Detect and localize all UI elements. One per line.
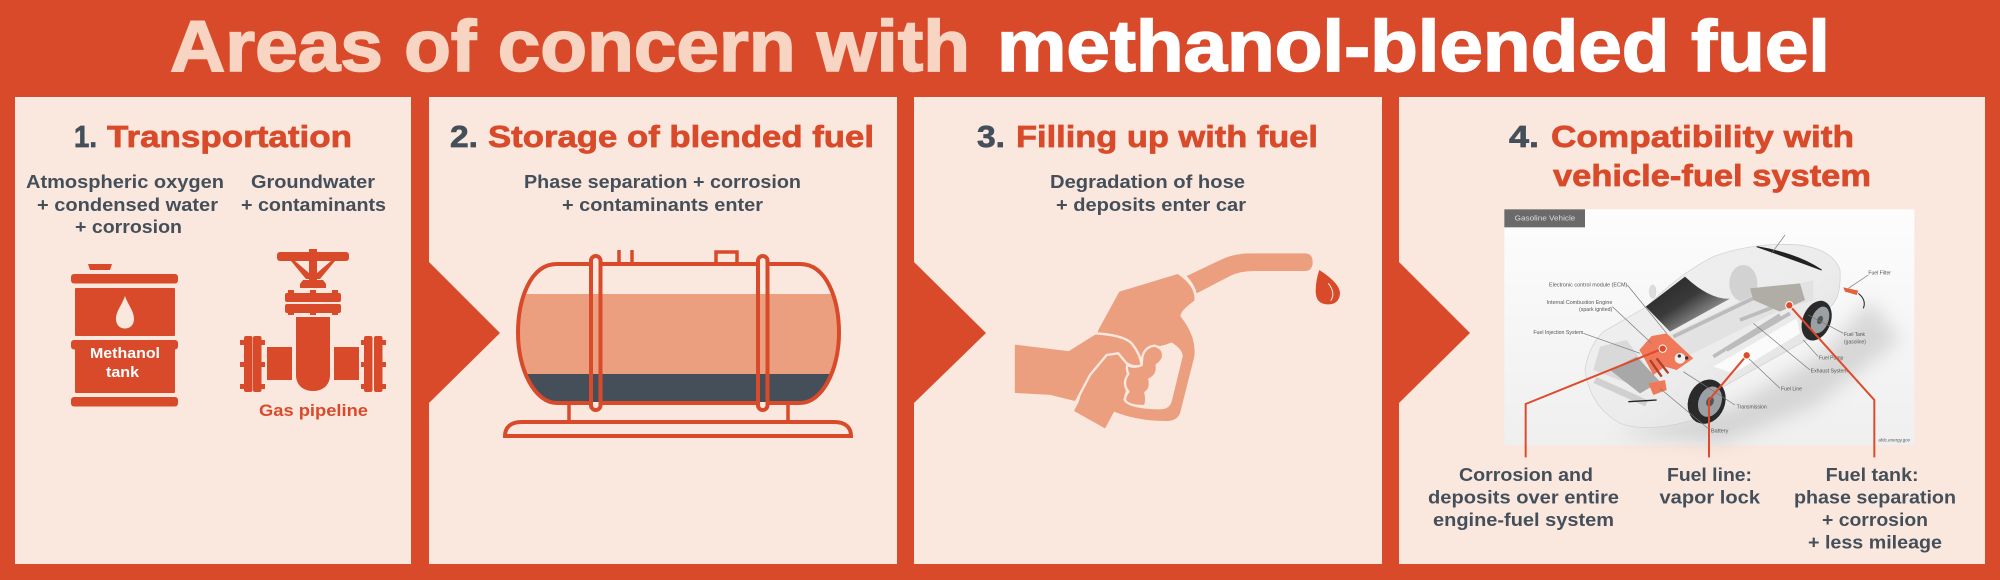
text: engine-fuel system: engine-fuel system: [1433, 510, 1614, 530]
text: pipeline risks: + contaminants: [241, 195, 386, 215]
part labels: Battery: [1711, 429, 1728, 435]
engine highlight: [1639, 333, 1693, 395]
text: storage risks: Phase separation + corrosion: [524, 172, 801, 192]
part labels: Exhaust System: [1811, 369, 1848, 375]
icon: storage tank: [505, 250, 851, 436]
text: pipeline risks: Groundwater: [251, 172, 375, 192]
badge: gasoline vehicle: [1504, 209, 1585, 227]
text: fuel line: Fuel line:: [1667, 465, 1752, 485]
icon: methanol tank: tank: [106, 364, 140, 381]
title: Areas of concern with: [170, 7, 970, 87]
heading: 4. Compatibility with vehicle-fuel system: [1509, 119, 1871, 193]
part labels: (spark ignited): [1579, 307, 1612, 313]
car shadow: [1613, 300, 1900, 443]
text: fuel tank: phase separation: [1794, 488, 1956, 508]
panel: transportation: [15, 97, 411, 564]
text: fuel line: [1660, 465, 1761, 508]
title: [170, 7, 1830, 87]
text: fuel tank: + corrosion: [1822, 510, 1928, 530]
part labels: Fuel Line: [1781, 387, 1802, 393]
text: fuel line: vapor lock: [1660, 488, 1761, 508]
text: tank risks: [26, 172, 224, 237]
title: methanol-blended fuel: [997, 7, 1830, 87]
part labels: afdc.energy.gov: [1878, 437, 1911, 442]
heading: 3. Filling up with fuel: 3.: [977, 119, 1005, 154]
leader lines: [1583, 235, 1868, 430]
panel: compatibility with vehicle-fuel system: [1399, 97, 1985, 564]
icon: fuel nozzle and hand: [1009, 253, 1340, 428]
diagram: gasoline vehicle: [1504, 209, 1914, 457]
text: fuel tank: + less mileage: [1808, 532, 1942, 552]
text: tank risks: + corrosion: [75, 217, 182, 237]
text: engine-fuel system: deposits over entire: [1428, 488, 1619, 508]
car body: [1585, 244, 1864, 430]
arrow: step 2 to 3: [910, 258, 986, 407]
part labels: [1533, 270, 1911, 442]
callout lines: [1526, 305, 1874, 457]
text: fuel tank: [1794, 465, 1956, 552]
icon: methanol tank: Methanol: [90, 345, 160, 362]
text: fuel tank: Fuel tank:: [1826, 465, 1919, 485]
heading: 4. Compatibility with vehicle-fuel system: Compatibility with: [1551, 119, 1854, 154]
part labels: Fuel Pump: [1819, 355, 1843, 361]
text: pipeline risks: [241, 172, 386, 215]
part labels: Fuel Tank: [1844, 332, 1865, 338]
heading: 4. Compatibility with vehicle-fuel system: vehicle-fuel system: [1553, 158, 1871, 193]
part labels: Internal Combustion Engine: [1547, 300, 1612, 306]
panel: filling up with fuel: [914, 97, 1382, 564]
text: tank risks: + condensed water: [37, 195, 218, 215]
badge: gasoline vehicle: Gasoline Vehicle: [1515, 214, 1575, 223]
text: storage risks: + contaminants enter: [562, 195, 763, 215]
part labels: Fuel Filter: [1868, 270, 1891, 276]
text: tank risks: Atmospheric oxygen: [26, 172, 224, 192]
text: engine-fuel system: [1428, 465, 1619, 530]
part labels: Electronic control module (ECM): [1549, 283, 1627, 289]
icon: gas pipeline valve: [240, 249, 386, 420]
panel: storage of blended fuel: [429, 97, 897, 564]
callout dots: [1659, 302, 1793, 359]
part labels: Transmission: [1737, 405, 1767, 411]
heading: 1. Transportation: 1.: [74, 119, 97, 154]
heading: 2. Storage of blended fuel: 2.: [450, 119, 478, 154]
text: storage risks: [524, 172, 801, 215]
text: filling risks: + deposits enter car: [1056, 195, 1246, 215]
heading: 2. Storage of blended fuel: Storage of blended fuel: [488, 119, 874, 154]
heading: 3. Filling up with fuel: Filling up with fuel: [1016, 119, 1318, 154]
text: filling risks: [1050, 172, 1246, 215]
icon: gas pipeline valve: Gas pipeline: [259, 401, 368, 420]
part labels: (gasoline): [1844, 339, 1866, 345]
arrow: step 1 to 2: [425, 258, 500, 407]
heading: 1. Transportation: Transportation: [107, 119, 352, 154]
arrow: step 3 to 4: [1395, 258, 1470, 407]
text: engine-fuel system: Corrosion and: [1459, 465, 1593, 485]
part labels: Fuel Injection System: [1533, 330, 1584, 336]
text: filling risks: Degradation of hose: [1050, 172, 1245, 192]
heading: 4. Compatibility with vehicle-fuel system: 4.: [1509, 119, 1539, 154]
icon: methanol tank: [71, 264, 178, 406]
